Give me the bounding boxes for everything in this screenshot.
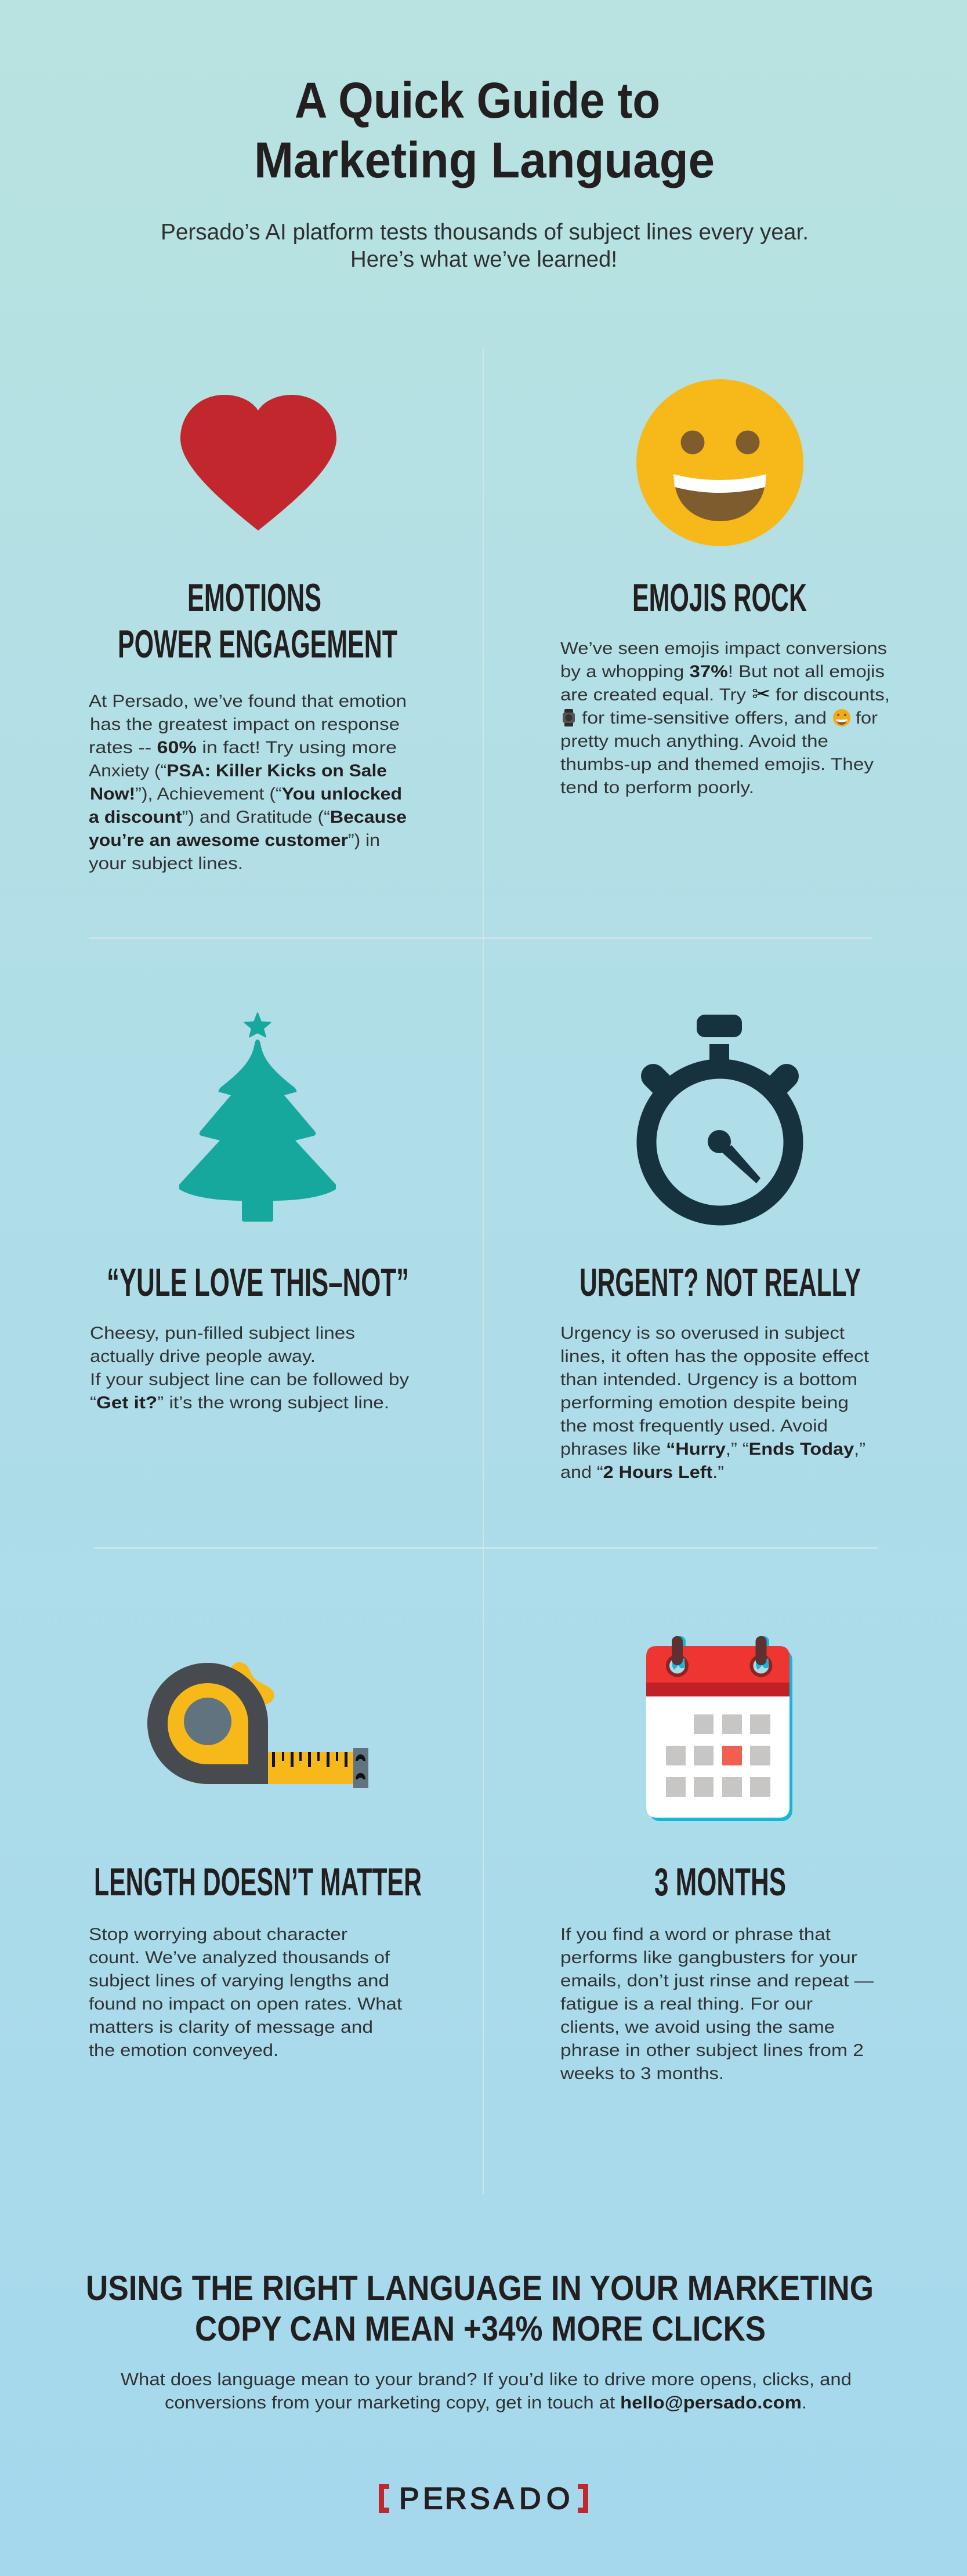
text: yule body: “Get it? ” it’s the wrong subject line. — [90, 1393, 389, 1412]
text: length body: Stop worrying about character — [89, 1925, 347, 1944]
text: emotions body: a discount ”) and Gratitude (“ Because — [89, 808, 407, 827]
callout heading: USING THE RIGHT LANGUAGE IN YOUR MARKETING — [86, 2269, 874, 2308]
text: emojis body — [560, 639, 890, 797]
text: three months body: emails, don’t just rinse and repeat — — [560, 1971, 874, 1990]
text: length body: matters is clarity of message and — [89, 2018, 373, 2037]
heading: emojis: EMOJIS ROCK — [632, 576, 807, 620]
text: three months body — [560, 1925, 874, 2083]
text: urgent body — [560, 1324, 870, 1482]
text: emojis body: We’ve seen emojis impact conversions — [560, 639, 887, 658]
text: emojis body: by a whopping 37%! But not all emojis — [560, 662, 885, 681]
icon: calendar — [646, 1636, 792, 1821]
text: three months body: performs like gangbusters for your — [560, 1948, 857, 1967]
text: emojis body: for discounts, — [776, 685, 890, 704]
icon: heart — [180, 395, 336, 531]
heading: three months: 3 MONTHS — [654, 1860, 786, 1904]
callout heading — [86, 2269, 874, 2348]
text: length body: found no impact on open rates. What — [89, 1994, 403, 2014]
text: emotions body: your subject lines. — [89, 854, 243, 873]
text: emojis body: are created equal. Try — [560, 685, 746, 704]
subtitle: Here’s what we’ve learned! — [350, 247, 617, 272]
text: three months body: clients, we avoid using the same — [560, 2018, 835, 2037]
text: emotions body: you’re an awesome customer ”) in — [89, 831, 380, 850]
panel: yule — [90, 1013, 409, 1412]
callout text: conversions from your marketing copy, get in touch at hello@persado.com . — [165, 2392, 807, 2412]
logo: persado: PERSADO — [399, 2482, 570, 2516]
text: urgent body: and “2 Hours Left .” — [560, 1463, 724, 1482]
icon: small watch emoji — [563, 709, 575, 726]
text: length body: the emotion conveyed. — [89, 2041, 278, 2060]
text: emojis body: for — [856, 709, 878, 728]
text: yule body: actually drive people away. — [90, 1347, 316, 1366]
text: emotions body: At Persado, we’ve found that emotion — [89, 692, 407, 711]
heading: length: LENGTH DOESN’T MATTER — [94, 1860, 422, 1904]
title: A Quick Guide to — [295, 72, 660, 129]
icon: tape measure — [147, 1662, 368, 1788]
text: emotions body: rates -- 60% in fact! Try using more — [89, 738, 397, 757]
heading: emotions: POWER ENGAGEMENT — [118, 622, 397, 666]
text: urgent body: than intended. Urgency is a bottom — [560, 1370, 857, 1389]
title: Marketing Language — [254, 132, 715, 188]
panel: urgent — [560, 1015, 870, 1482]
subtitle: Persado’s AI platform tests thousands of subject lines every year. — [161, 220, 809, 245]
text: emojis body: tend to perform poorly. — [560, 778, 754, 797]
text: emotions body: Now!”), Achievement (“ You unlocked — [90, 784, 402, 804]
text: yule body — [90, 1324, 409, 1412]
heading: emotions: EMOTIONS — [187, 576, 321, 620]
icon: stopwatch — [641, 1015, 799, 1215]
text: urgent body: Urgency is so overused in subject — [560, 1324, 845, 1343]
text: length body: subject lines of varying lengths and — [89, 1971, 389, 1990]
icon: small smiley emoji — [833, 709, 850, 726]
text: yule body: If your subject line can be followed by — [90, 1370, 409, 1389]
text: three months body: fatigue is a real thing. For our — [560, 1994, 813, 2014]
panel: emotions — [89, 395, 407, 873]
text: three months body: phrase in other subject lines from 2 — [560, 2041, 864, 2060]
text: length body — [89, 1925, 403, 2060]
heading: emotions — [118, 576, 397, 666]
title — [254, 72, 715, 188]
text: urgent body: lines, it often has the opposite effect — [560, 1347, 870, 1366]
text: urgent body: the most frequently used. Avoid — [560, 1416, 828, 1436]
text: urgent body: phrases like “Hurry ,” “Ends Today ,” — [560, 1440, 865, 1459]
subtitle — [161, 220, 809, 272]
text: emojis body: pretty much anything. Avoid the — [560, 732, 828, 751]
text: yule body: Cheesy, pun-filled subject lines — [90, 1324, 355, 1343]
text: urgent body: performing emotion despite being — [560, 1393, 849, 1412]
text: emojis body: ✂ — [752, 682, 771, 706]
heading: yule: “YULE LOVE THIS–NOT” — [107, 1260, 409, 1305]
text: emotions body — [89, 692, 407, 873]
text: emojis body: for time-sensitive offers, and — [582, 709, 827, 728]
panel: three months — [560, 1636, 874, 2083]
text: emojis body: thumbs-up and themed emojis. They — [560, 755, 874, 774]
text: emotions body: Anxiety (“ PSA: Killer Kicks on Sale — [89, 761, 387, 780]
text: emotions body: has the greatest impact on response — [90, 715, 400, 734]
callout heading: COPY CAN MEAN +34% MORE CLICKS — [195, 2309, 766, 2348]
panel: emojis — [560, 379, 890, 797]
icon: smiley — [636, 379, 803, 546]
panel: length — [89, 1662, 422, 2060]
icon: christmas tree — [179, 1013, 336, 1222]
callout text — [121, 2369, 852, 2412]
text: three months body: weeks to 3 months. — [560, 2064, 724, 2083]
callout text: What does language mean to your brand? If you’d like to drive more opens, clicks, and — [121, 2369, 852, 2389]
text: three months body: If you find a word or phrase that — [560, 1925, 831, 1944]
text: length body: count. We’ve analyzed thousands of — [89, 1948, 390, 1967]
